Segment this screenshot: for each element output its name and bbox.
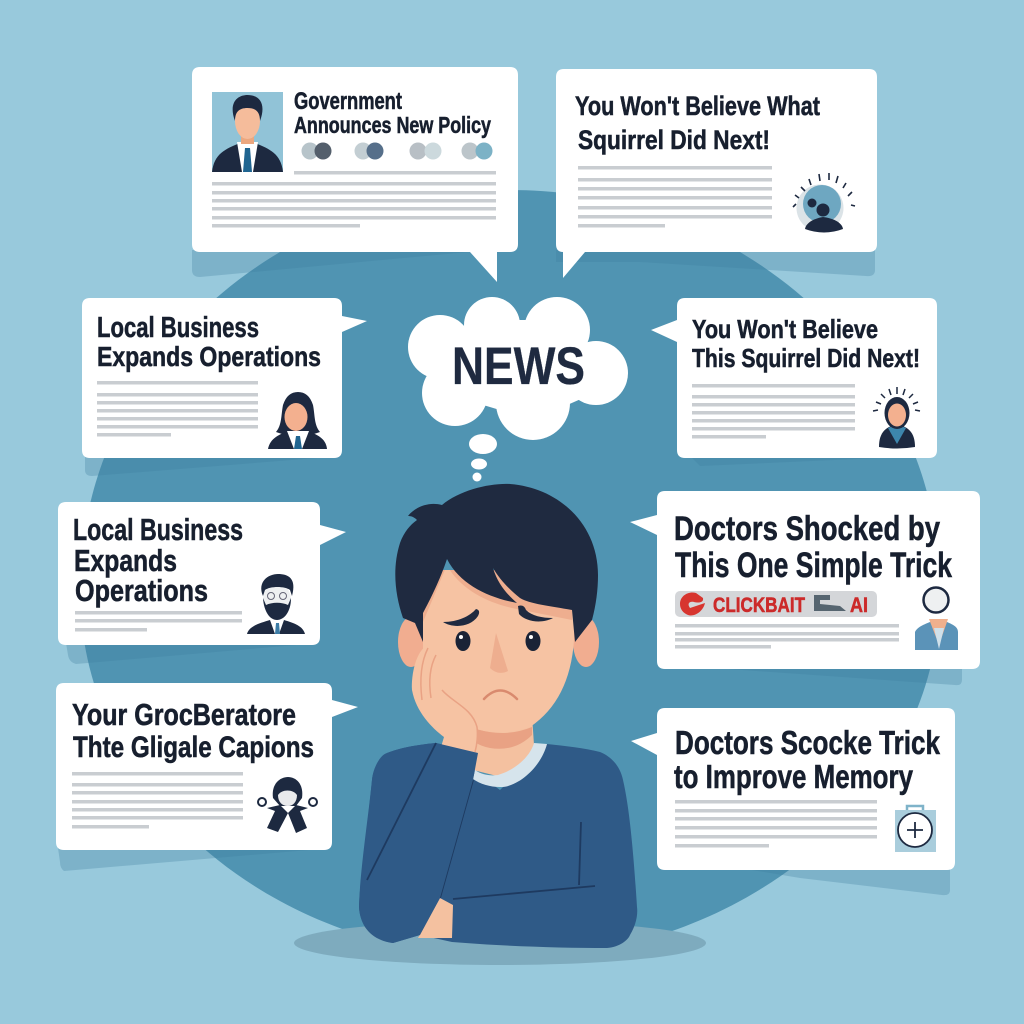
headline: Expands Operations xyxy=(97,341,321,372)
mouth xyxy=(484,690,517,699)
body text lines xyxy=(72,772,243,828)
headline: Local Business xyxy=(73,512,243,547)
finger lines xyxy=(421,648,477,752)
eyebrows xyxy=(443,606,553,626)
nose xyxy=(490,633,508,673)
forehead shadow xyxy=(423,570,572,622)
icon: bearded man xyxy=(247,574,305,634)
sleeve fold line xyxy=(367,743,436,880)
panel: government policy xyxy=(192,67,518,282)
headline xyxy=(73,512,243,608)
headline: to Improve Memory xyxy=(674,758,913,795)
body text lines xyxy=(212,171,496,228)
right ear xyxy=(573,617,599,667)
headline: Expands xyxy=(74,543,177,578)
eyes xyxy=(456,631,540,651)
icon: small machine xyxy=(814,595,846,611)
body text lines xyxy=(578,166,772,228)
body text lines xyxy=(675,624,899,648)
person xyxy=(359,484,637,948)
thought cloud xyxy=(408,297,628,482)
headline xyxy=(674,510,952,585)
icon: red swirl xyxy=(680,593,705,615)
headline: Thte Gligale Capions xyxy=(73,731,314,764)
headline: Local Business xyxy=(97,312,259,344)
panel: doctors shocked xyxy=(630,491,980,669)
exposed hand at elbow xyxy=(418,898,453,938)
left ear xyxy=(398,617,424,667)
icon: doctor with magnifier xyxy=(915,588,958,650)
collar xyxy=(473,743,547,787)
panel: local business left xyxy=(58,502,346,645)
headline: Squirrel Did Next! xyxy=(578,125,770,155)
ground shadow xyxy=(294,921,706,965)
panel: squirrel headline xyxy=(556,69,877,278)
headline xyxy=(72,697,314,764)
icon: woman xyxy=(268,392,327,449)
headline: Operations xyxy=(75,573,208,608)
sweater body xyxy=(359,743,637,948)
icon: medical kit xyxy=(895,806,936,852)
headline xyxy=(97,312,321,372)
headline xyxy=(294,88,491,138)
panel: squirrel right xyxy=(651,298,937,458)
panel: local business top xyxy=(82,298,367,458)
headline xyxy=(575,91,820,155)
headline: Announces New Policy xyxy=(294,112,491,138)
headline: This Squirrel Did Next! xyxy=(692,343,920,373)
headline: You Won't Believe What xyxy=(575,91,820,121)
icon: figure with raised fists xyxy=(258,777,317,833)
body text lines xyxy=(75,611,242,632)
neck xyxy=(473,715,534,776)
card shadows xyxy=(58,250,962,895)
face xyxy=(423,570,574,732)
news label: NEWS xyxy=(452,337,585,396)
background circle xyxy=(80,190,940,958)
icon: silhouette with rays xyxy=(793,173,855,232)
clickbait banner: CLICKBAIT xyxy=(713,594,805,617)
panel: doctors memory xyxy=(631,708,955,870)
hair xyxy=(395,484,598,642)
headline xyxy=(674,724,941,795)
headline: Your GrocBeratore xyxy=(72,697,296,732)
body text lines xyxy=(97,381,258,436)
reaction bubbles xyxy=(302,142,492,160)
clickbait banner xyxy=(675,591,877,617)
headline: Government xyxy=(294,88,402,115)
icon: portrait xyxy=(212,92,283,172)
headline xyxy=(692,314,920,373)
headline: Doctors Shocked by xyxy=(674,510,940,548)
body text lines xyxy=(675,800,877,848)
panel: grocery xyxy=(56,683,358,850)
sleeve cuff xyxy=(359,743,478,943)
headline: Doctors Scocke Trick xyxy=(675,724,941,761)
clickbait banner: AI xyxy=(850,594,868,617)
hand xyxy=(412,645,478,753)
icon: woman with rays xyxy=(873,387,920,448)
body text lines xyxy=(692,384,855,438)
headline: You Won't Believe xyxy=(692,314,878,344)
neck shadow xyxy=(475,727,532,749)
sweater fold lines xyxy=(440,780,595,899)
